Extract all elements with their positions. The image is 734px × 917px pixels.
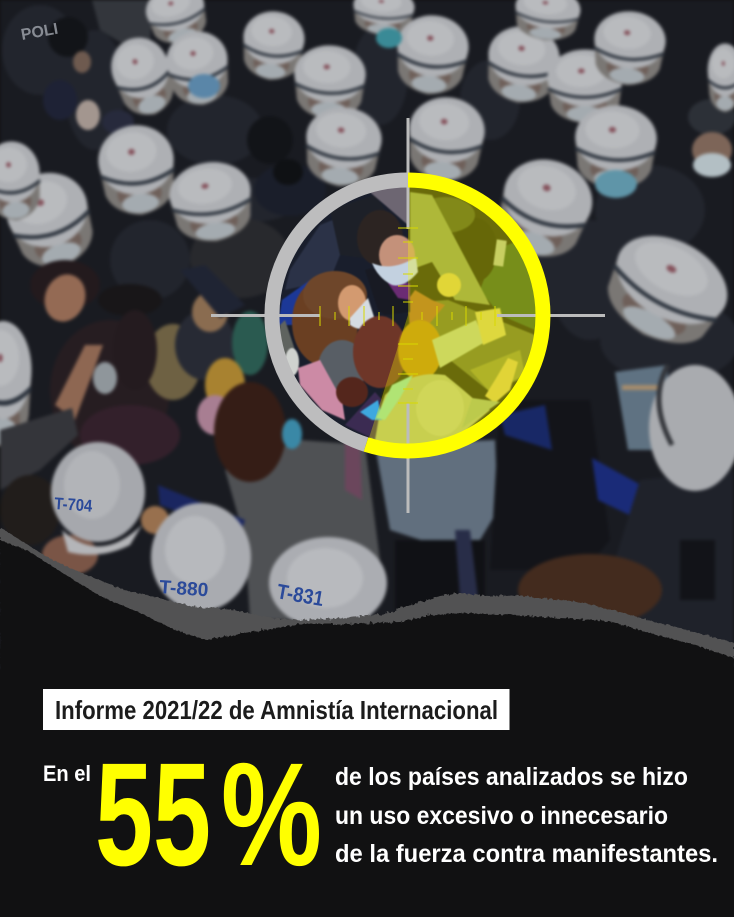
torn paper edge	[0, 527, 734, 680]
protesters left	[50, 320, 170, 460]
police uniforms	[2, 5, 734, 382]
blue medical masks	[188, 74, 220, 98]
label box: report title	[43, 689, 510, 730]
scope lens: zoomed photo of two protesters	[280, 188, 536, 444]
green police sleeve	[480, 242, 536, 330]
mask woman 1	[372, 257, 418, 285]
pink jacket	[298, 360, 345, 420]
right half base	[368, 188, 534, 438]
face woman 1	[378, 234, 416, 268]
statement text: un uso excesivo o innecesario	[335, 802, 668, 830]
helmet numbers: T-704	[54, 494, 93, 516]
camera	[180, 265, 245, 318]
curly brown hair bottom right	[518, 554, 662, 626]
dark shields	[490, 400, 610, 570]
cyan scarf	[360, 400, 382, 420]
sleeve and yellow glove upper	[432, 320, 485, 368]
mask woman 2	[350, 298, 375, 329]
street patch	[92, 0, 152, 48]
grey jacket woman	[225, 440, 380, 620]
blue banner	[280, 280, 310, 326]
jacket woman 1	[365, 268, 410, 315]
right policeman	[615, 470, 734, 650]
helmet swirl	[484, 250, 496, 279]
white helmets T-704, T-880, T-831	[51, 442, 387, 629]
statement text: de la fuerza contra manifestantes.	[335, 840, 718, 868]
black lower panel	[0, 540, 734, 917]
plaid jacket	[318, 339, 364, 390]
statement text: de los países analizados se hizo	[335, 763, 688, 791]
jacket lettering: POLI	[20, 21, 59, 44]
yellow glove lower	[485, 358, 518, 403]
mint scarf	[376, 375, 413, 420]
hair woman 1	[357, 210, 403, 266]
scope ring: yellow arc	[366, 180, 543, 451]
curly hair woman 2	[291, 287, 358, 364]
helmet numbers: T-880	[159, 577, 209, 601]
green tall shield	[410, 192, 490, 305]
shields at upper left	[285, 220, 340, 290]
big statistic: 55%: 55	[95, 733, 211, 897]
lower-left dark gear	[0, 475, 60, 545]
black caps	[43, 17, 734, 185]
crosshair yellow ticks	[320, 228, 495, 403]
purple bag strap	[345, 392, 382, 440]
big right helmet and visor	[615, 365, 668, 450]
teal hat	[280, 320, 295, 356]
grey-blue jacket woman	[375, 440, 498, 543]
background photo: crowd of riot police and protesters	[0, 0, 734, 680]
helmet numbers	[54, 494, 326, 611]
yellow glove centre	[437, 273, 461, 297]
face woman 2	[338, 285, 366, 321]
white badge	[493, 239, 507, 267]
scope ring: grey arc	[272, 180, 408, 444]
scarf orange	[408, 290, 445, 324]
green jacket woman 3	[368, 374, 490, 450]
helmet numbers: T-831	[275, 580, 326, 611]
label box: report title: Informe 2021/22 de Amnistía Internacional	[55, 695, 498, 725]
crosshair lines	[211, 118, 605, 513]
lower shield	[422, 300, 535, 392]
yellow tint on right half of lens	[369, 188, 536, 444]
hair woman 3	[353, 316, 407, 388]
big statistic: 55%: %	[221, 733, 322, 897]
statement text	[335, 763, 718, 868]
intro text: En el	[43, 761, 91, 786]
riot helmets	[141, 0, 213, 50]
blue police banners	[500, 405, 552, 450]
